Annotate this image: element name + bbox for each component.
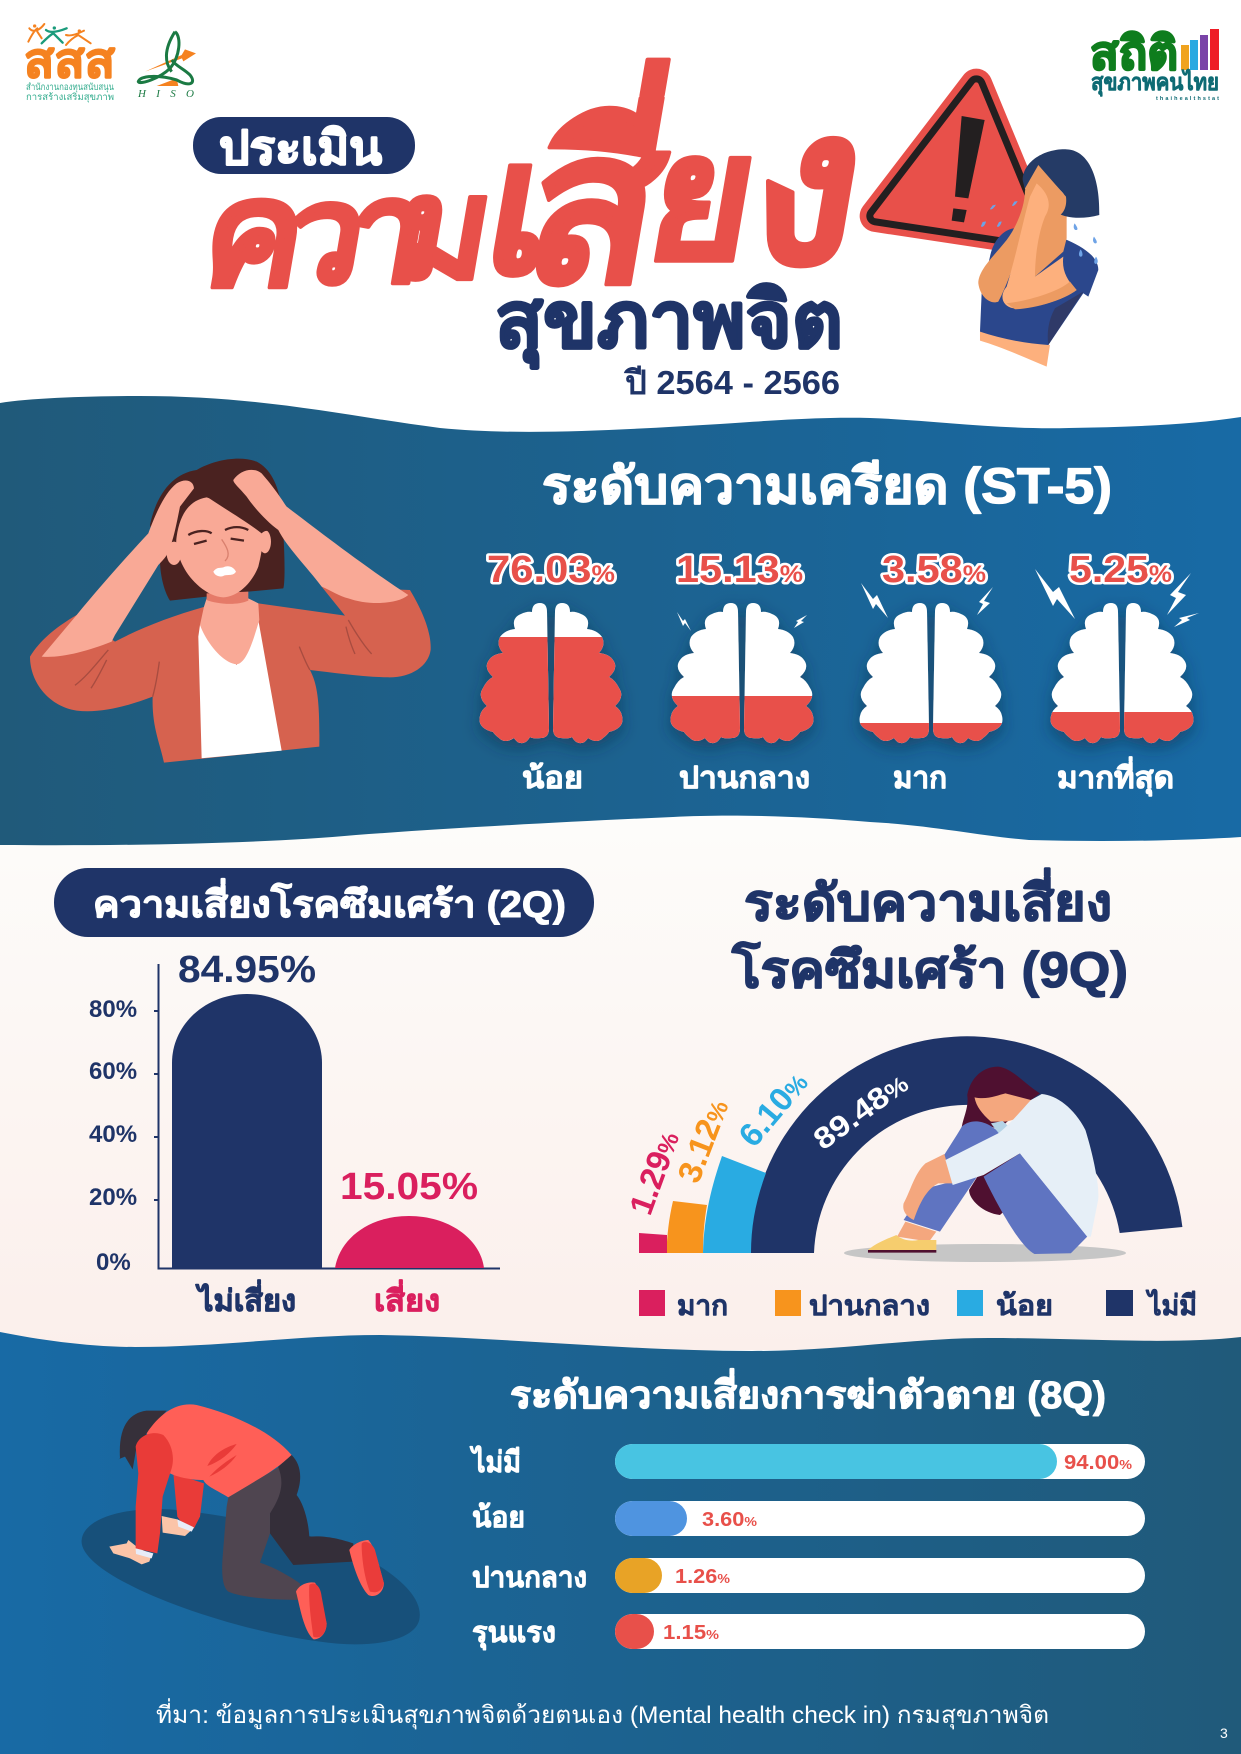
title: ความเสี่ยง: ย [636, 100, 772, 296]
logo caption: สำนักงานกองทุนสนับสนุน [26, 82, 114, 93]
far hand [162, 1516, 193, 1536]
title: ความเสี่ยง: า [335, 154, 442, 312]
back shoe [349, 1540, 384, 1596]
shirt [945, 1094, 1098, 1237]
illustration: seated woman [868, 1067, 1098, 1254]
near cuff [136, 1548, 153, 1558]
ears [167, 542, 181, 565]
heading: 9Q: ระดับความเสี่ยง [744, 868, 1112, 931]
arm skin [903, 1154, 953, 1220]
bars: suicide risk [469, 1444, 1145, 1650]
row: ปานกลาง: 1.26 % [675, 1566, 730, 1588]
row: น้อย: 3.60 % [702, 1509, 757, 1531]
back hair [150, 459, 285, 601]
legend: ปานกลาง: ปานกลาง [809, 1290, 930, 1321]
far arm [173, 1473, 204, 1528]
bar: ไม่เสี่ยง [172, 994, 322, 1268]
icon: bar chart [1181, 29, 1219, 70]
segment: น้อย [703, 1156, 766, 1253]
value: 15.13%: 15.13 % [676, 549, 803, 591]
stress chart: brains [471, 603, 1202, 748]
near arm [136, 1433, 173, 1553]
pill: ประเมิน [193, 117, 415, 174]
brain: มาก [851, 603, 1011, 748]
value: 1.29%: 1.29% [622, 1126, 686, 1219]
heading: suicide risk: ระดับความเสี่ยงการฆ่าตัวตาย (8Q) [510, 1368, 1106, 1417]
far cuff [177, 1519, 194, 1532]
logo caption: การสร้างเสริมสุขภาพ [26, 92, 114, 103]
panel: suicide risk section wave background [0, 1332, 1241, 1754]
legend: น้อย: น้อย [996, 1290, 1053, 1321]
row: รุนแรง: รุนแรง [472, 1617, 556, 1650]
url: thaihealthstat [1156, 96, 1219, 102]
face details [188, 527, 248, 544]
front shoe [296, 1582, 327, 1639]
heading: 9Q: โรคซึมเศร้า (9Q) [731, 940, 1128, 998]
icon: three figures [28, 24, 91, 45]
row: ปานกลาง [472, 1558, 1145, 1594]
brain: มากที่สุด [1042, 603, 1202, 747]
row: รุนแรง [472, 1614, 1145, 1650]
icon: warning triangle [876, 85, 1041, 241]
stress labels [522, 756, 1174, 797]
near leg [904, 1121, 1000, 1232]
neck [1027, 210, 1067, 277]
value: 6.10%: 6.10% [731, 1064, 815, 1153]
illustration: crawling person [82, 1404, 420, 1644]
row: ปานกลาง: ปานกลาง [472, 1562, 587, 1594]
far leg [984, 1153, 1087, 1254]
legend: ไม่มี [1106, 1289, 1197, 1321]
label: น้อย: น้อย [522, 762, 583, 795]
title: ความเสี่ยง: ง [736, 67, 882, 308]
panel: stress section wave background [0, 396, 1241, 845]
legend: 9Q [639, 1289, 1197, 1321]
subtitle: years: ปี 2564 - 2566 [624, 364, 840, 401]
panel: depression section background [0, 820, 1241, 1350]
pill heading: 2Q: ความเสี่ยงโรคซึมเศร้า (2Q) [93, 878, 566, 925]
axis [154, 964, 500, 1268]
segment: ปานกลาง [666, 1201, 707, 1253]
heading: stress: ระดับความเครียด (ST-5) [542, 458, 1112, 514]
axis labels: 80% [89, 996, 137, 1023]
front leg [222, 1467, 300, 1600]
forearm back [978, 190, 1033, 302]
forearm front [1002, 183, 1077, 308]
back leg [270, 1455, 353, 1565]
row: ไม่มี: ไม่มี [469, 1445, 521, 1479]
value: 89.48%: 89.48% [808, 1066, 914, 1157]
value: 15.05%: 15.05% [340, 1166, 478, 1208]
value: 84.95%: 84.95% [178, 949, 316, 991]
logo: HISO [137, 32, 196, 100]
bar chart: 2Q [89, 949, 500, 1318]
pill heading: 2Q [54, 868, 594, 937]
skin chest and neck [980, 332, 1050, 367]
right arm [233, 470, 408, 603]
title: ความเสี่ยง: เ [473, 105, 571, 312]
illustration: stressed woman [30, 459, 431, 763]
loops [138, 32, 193, 84]
value: 5.25%: 5.25% [1069, 549, 1172, 591]
torso [147, 1404, 292, 1497]
ground shadow [844, 1244, 1126, 1262]
value: 3.12%: 3.12% [670, 1094, 735, 1188]
logo wordmark: สสส [24, 35, 116, 88]
mouth [213, 566, 236, 576]
source note: ที่มา: ข้อมูลการประเมินสุขภาพจิตด้วยตนเอง (Mental health check in) กรมสุขภาพจิต [156, 1698, 1049, 1730]
shirt creases [207, 1444, 237, 1477]
arrow [145, 49, 196, 72]
face [176, 497, 262, 597]
row: น้อย: น้อย [472, 1502, 525, 1534]
label: ไม่เสี่ยง: ไม่เสี่ยง [195, 1279, 296, 1318]
axis labels: 60% [89, 1058, 137, 1085]
logo: HISO: H I S O [137, 88, 194, 100]
logo: ThaiHealth สสส [24, 24, 116, 103]
heading: 9Q [731, 868, 1128, 998]
jacket [30, 587, 431, 763]
bar: เสี่ยง [335, 1216, 484, 1268]
row: ไม่มี: 94.00 % [1064, 1452, 1132, 1474]
segment: มาก [639, 1233, 667, 1253]
floor shadow [82, 1509, 420, 1644]
icons: lightning bolts [677, 569, 1199, 631]
face [975, 1093, 1031, 1122]
hair fringe [170, 483, 272, 545]
title: ความเสี่ยง: สี่ [510, 60, 686, 327]
label: ปานกลาง: ปานกลาง [679, 762, 810, 795]
label: มากที่สุด: มากที่สุด [1057, 756, 1174, 797]
row: รุนแรง: 1.15 % [663, 1622, 719, 1644]
value: 3.58%: 3.58 % [882, 549, 986, 591]
legend: มาก [639, 1290, 728, 1321]
label: มาก: มาก [893, 762, 947, 795]
legend: มาก: มาก [677, 1290, 728, 1321]
title: ความเสี่ยง: ม [386, 150, 505, 307]
shirt [980, 228, 1098, 345]
arc chart: 9Q [622, 1036, 1182, 1262]
axis labels: 0% [96, 1249, 131, 1276]
title: ความเสี่ยง: ค [192, 151, 319, 317]
value: 76.03%: 76.03 % [487, 549, 615, 591]
shin skin [897, 1222, 936, 1242]
pill: ประเมิน: ประเมิน [219, 121, 382, 174]
legend: ไม่มี: ไม่มี [1145, 1289, 1197, 1321]
brain: ปานกลาง [662, 603, 822, 746]
jacket creases [75, 620, 372, 697]
shoes [868, 1235, 936, 1250]
tears [981, 201, 1098, 264]
axis labels: 40% [89, 1121, 137, 1148]
row: น้อย [472, 1501, 1145, 1536]
legend: น้อย [957, 1290, 1053, 1321]
chest [200, 598, 259, 664]
shirt [198, 620, 282, 758]
logo: สถิติสุขภาพคนไทย [1090, 27, 1219, 102]
illustration: crying woman [978, 149, 1099, 367]
neck shadow [207, 592, 248, 604]
axis labels: 20% [89, 1184, 137, 1211]
axis labels [89, 996, 137, 1276]
hair [1023, 149, 1099, 218]
stress values [487, 549, 1172, 591]
collar [991, 1121, 1010, 1133]
segment: ไม่มี [750, 1036, 1182, 1253]
page number: 3 [1220, 1725, 1228, 1741]
wordmark: สถิติ [1090, 27, 1178, 79]
near hand [109, 1540, 152, 1564]
logo caption [26, 82, 114, 103]
label: เสี่ยง: เสี่ยง [374, 1279, 440, 1318]
row: ไม่มี [469, 1444, 1145, 1479]
title: สุขภาพจิต: สุขภาพจิต [495, 276, 843, 369]
left arm [42, 481, 194, 657]
back hair [962, 1067, 1040, 1130]
face [1025, 165, 1066, 222]
brain: น้อย [471, 603, 631, 747]
title: ความเสี่ยง: ว [275, 159, 378, 312]
sub wordmark: สุขภาพคนไทย [1091, 68, 1219, 97]
hair [118, 1411, 167, 1469]
